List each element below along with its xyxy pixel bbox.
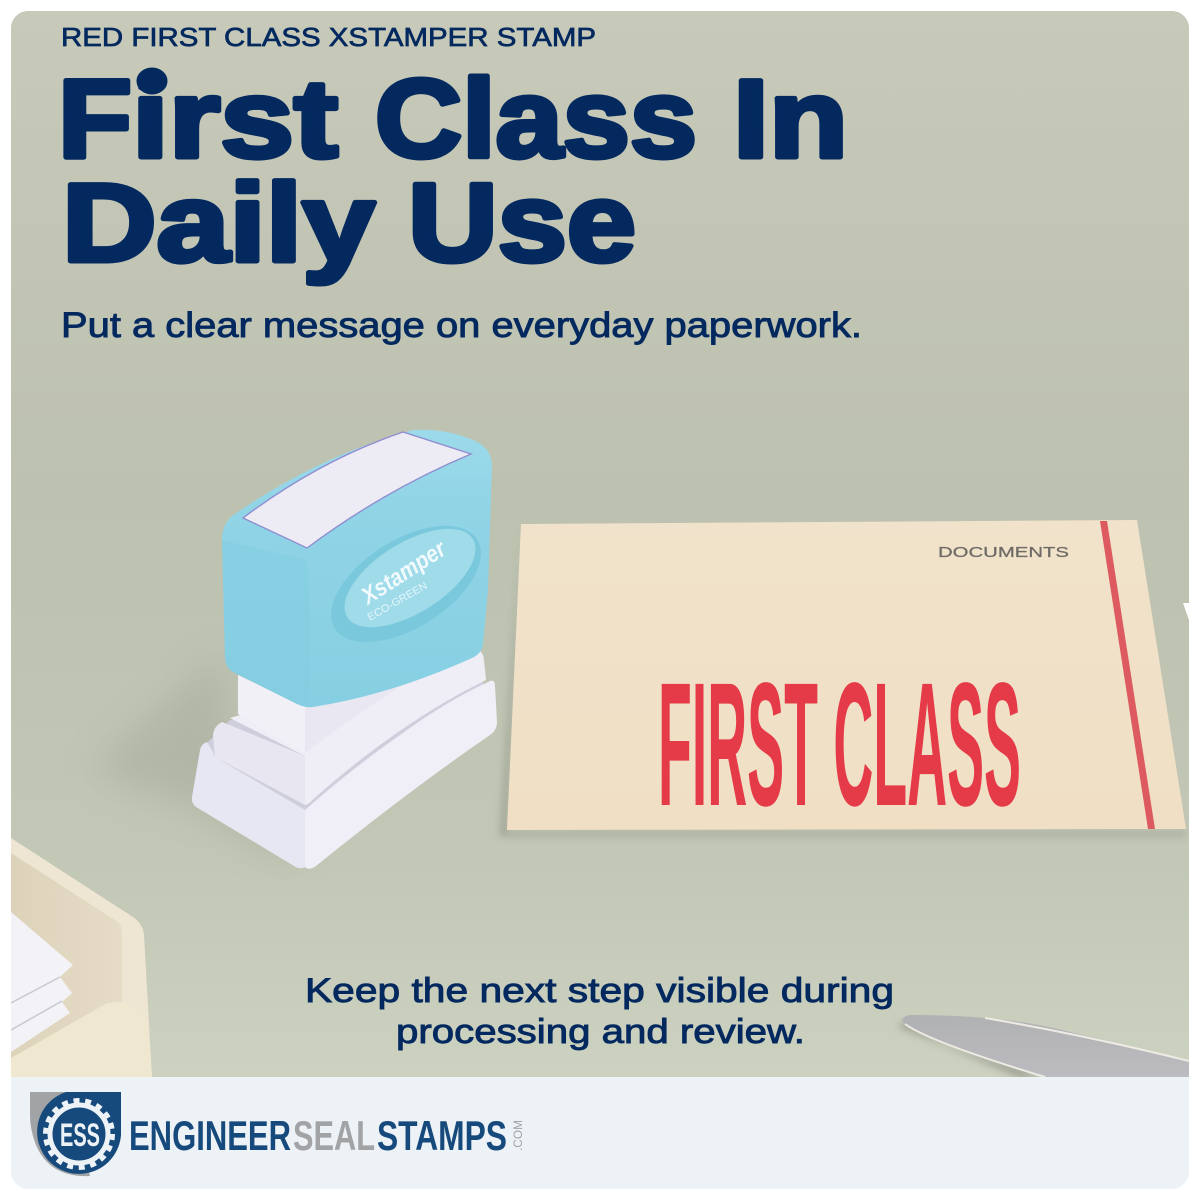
logo blue shield bbox=[37, 1092, 121, 1174]
stamp shadow bbox=[114, 678, 236, 832]
knife shadow bbox=[898, 1022, 1043, 1077]
title word: Daily: Daily bbox=[62, 161, 375, 285]
letter opener blade bbox=[902, 1015, 1189, 1077]
envelope red band bbox=[1100, 521, 1155, 829]
logo gear teeth bbox=[46, 1100, 112, 1168]
stamp tray interior bbox=[208, 682, 484, 810]
stamp neck left face bbox=[238, 675, 290, 715]
stamp neck right face bbox=[305, 620, 467, 753]
stamp brand: Xstamper: Xstamper bbox=[355, 535, 452, 611]
stamp blue handle bbox=[222, 430, 492, 707]
envelope body bbox=[507, 520, 1186, 830]
blade bbox=[902, 1015, 1189, 1077]
scene: desk objects bbox=[11, 430, 1189, 1077]
edge notch bbox=[1183, 603, 1189, 620]
title word: First: F bbox=[58, 57, 132, 181]
desk tray with papers bbox=[11, 838, 152, 1077]
logo suffix: .COM: .COM bbox=[511, 1120, 525, 1151]
logo word: ENGINEER: ENGINEER bbox=[129, 1112, 291, 1159]
tray inner wall bbox=[11, 853, 122, 1060]
title word: Class: Class bbox=[375, 57, 697, 181]
footer band bbox=[11, 1077, 1189, 1189]
logo initials: ESS bbox=[60, 1117, 100, 1153]
icon: Xstamper stamp bbox=[192, 430, 501, 869]
logo word: SEAL: SEAL bbox=[293, 1112, 375, 1159]
subheading: Put a clear message on everyday paperwork. bbox=[61, 306, 862, 345]
title word: First: irst bbox=[132, 57, 338, 181]
stamp handle corner shade bbox=[222, 541, 298, 704]
logo gear ring bbox=[50, 1105, 108, 1163]
envelope label: DOCUMENTS: DOCUMENTS bbox=[938, 545, 1069, 561]
logo word: STAMPS: STAMPS bbox=[377, 1112, 507, 1159]
title i-dot bbox=[139, 70, 165, 92]
title word: Use: Use bbox=[408, 161, 636, 285]
stamp flange left face bbox=[213, 722, 305, 805]
title bbox=[58, 57, 848, 285]
blade edge highlights bbox=[905, 1018, 1189, 1077]
logo: EngineerSealStamps bbox=[30, 1092, 525, 1176]
logo mark bbox=[30, 1092, 121, 1176]
stamp tray right face bbox=[305, 681, 497, 869]
eyebrow text: RED FIRST CLASS XSTAMPER STAMP bbox=[61, 22, 596, 52]
stamp oval badge bbox=[331, 526, 481, 642]
envelope shadow bbox=[498, 634, 1186, 838]
paper fold lines bbox=[11, 977, 62, 1030]
stamp oval inner bbox=[344, 528, 476, 628]
paper stack bbox=[11, 912, 73, 1052]
caption line 2: processing and review. bbox=[396, 1013, 805, 1051]
envelope bbox=[507, 520, 1186, 843]
tray back wall bbox=[11, 838, 152, 1077]
stamp tray left face bbox=[192, 742, 305, 868]
title word: In: In bbox=[733, 57, 848, 181]
logo gray shield bbox=[30, 1092, 90, 1176]
stamp brand: ECO-GREEN: ECO-GREEN bbox=[366, 580, 430, 624]
caption bbox=[305, 972, 894, 1051]
caption line 1: Keep the next step visible during bbox=[305, 972, 894, 1010]
tray front wall bbox=[11, 1002, 122, 1060]
stamp white label bbox=[243, 432, 471, 548]
stamp flange right face bbox=[230, 648, 486, 805]
